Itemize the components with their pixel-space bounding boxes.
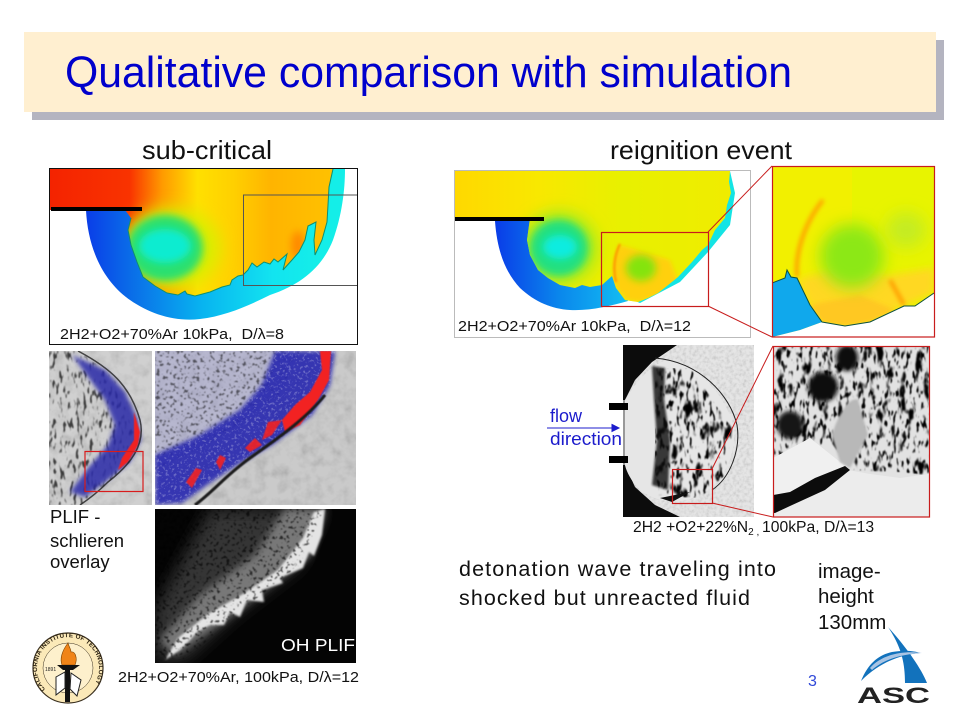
text: PLIF - schlieren overlay: overlay <box>50 551 110 572</box>
text: detonation description <box>459 557 776 610</box>
text: PLIF - schlieren overlay: PLIF - <box>50 506 100 527</box>
caption: schlieren conditions: 100kPa, D/λ=13 <box>762 519 874 536</box>
shock envelope <box>495 221 628 310</box>
burned gas texture <box>155 351 276 468</box>
PLIF blue band <box>70 355 141 497</box>
heading: sub-critical: sub-critical <box>142 135 272 165</box>
burned gas streaks <box>49 351 135 505</box>
nozzle bar <box>453 217 544 221</box>
caption: 2H2+O2+70%Ar 10kPa, D/λ=8 <box>60 326 284 343</box>
turbulence streaks <box>773 346 929 475</box>
connector lines: simulation zoom <box>708 166 772 337</box>
flow arrow <box>547 424 619 432</box>
shock line <box>78 351 141 505</box>
text: PLIF - schlieren overlay <box>50 506 124 572</box>
text: image height: 130mm <box>818 611 886 634</box>
PLIF blue band <box>155 351 335 505</box>
logo: Caltech seal: CALIFORNIA INSTITUTE OF TECHNOLOGY <box>32 633 104 691</box>
PLIF red front <box>118 412 140 470</box>
zoom frame <box>772 166 934 337</box>
PLIF red patches <box>282 351 331 432</box>
nozzle bar <box>51 207 142 211</box>
caption: schlieren conditions: 2H2 +O2+22%N <box>633 519 748 536</box>
panel: reignition simulation <box>453 170 750 338</box>
blue unreacted wedge <box>772 270 822 337</box>
flange bars <box>609 403 628 410</box>
light triangle <box>773 438 845 505</box>
dark turbulent band <box>652 366 670 490</box>
caption: OH PLIF conditions: 2H2+O2+70%Ar, 100kPa, D/λ=12 <box>118 669 359 686</box>
reaction lobe <box>799 266 934 312</box>
panel: PLIF-schlieren overlay image <box>49 351 152 505</box>
shock arcs <box>655 358 738 490</box>
page number: 3 <box>808 673 817 690</box>
dark shock wedge <box>773 466 850 513</box>
reacted region <box>50 169 350 299</box>
dark blots <box>808 372 838 402</box>
orange shock arc <box>797 200 823 277</box>
label: flow direction: flow <box>550 406 583 426</box>
reignition lobe <box>613 245 680 302</box>
text: detonation description: detonation wave traveling into <box>459 557 776 581</box>
black shock front <box>195 395 325 505</box>
panel: schlieren enlarged <box>773 345 930 517</box>
vortex glow <box>521 212 597 284</box>
bright reaction front <box>165 509 325 660</box>
white outside <box>772 293 934 338</box>
text: image height: height <box>818 585 874 608</box>
reacted region <box>455 171 740 306</box>
lower region <box>773 470 929 517</box>
panel: sub-critical simulation <box>50 168 358 344</box>
title banner <box>24 32 944 120</box>
detail box <box>602 232 708 306</box>
logo: ASC: ASC <box>857 683 930 708</box>
black corners <box>623 345 680 517</box>
text: PLIF - schlieren overlay: schlieren <box>50 530 124 551</box>
front outline <box>772 270 934 326</box>
green pocket <box>820 224 884 288</box>
vortex glow <box>120 208 220 288</box>
panel: simulation enlarged <box>772 166 934 338</box>
vortex core <box>543 235 577 259</box>
logo: Caltech seal: 1891 <box>45 667 56 673</box>
panel: overlay enlarged <box>155 351 356 505</box>
text: image height: image- <box>818 560 881 583</box>
zoom frame <box>774 346 930 517</box>
heading: reignition event: reignition event <box>610 135 793 165</box>
panel: reignition schlieren <box>609 345 754 517</box>
vortex core <box>139 229 191 263</box>
front outline <box>128 169 333 296</box>
inset rectangle <box>244 195 358 286</box>
text: detonation description: shocked but unreacted fluid <box>459 586 750 610</box>
panel: OH PLIF image <box>155 509 356 663</box>
label: flow direction <box>547 406 622 449</box>
mottling <box>155 509 325 660</box>
connector lines: schlieren zoom <box>712 346 773 517</box>
shock envelope <box>86 169 345 320</box>
logo: ASC <box>857 627 930 708</box>
text: image height <box>818 560 886 634</box>
label: OH PLIF <box>281 635 355 655</box>
wave body <box>625 360 734 502</box>
title: Qualitative comparison with simulation <box>65 48 792 97</box>
caption: schlieren conditions: 2 , <box>748 527 762 538</box>
caption: 2H2+O2+70%Ar 10kPa, D/λ=12 <box>458 318 691 335</box>
detail box <box>85 452 143 492</box>
detail box <box>672 470 712 504</box>
OH glow <box>155 509 325 660</box>
label: flow direction: direction <box>550 429 622 449</box>
